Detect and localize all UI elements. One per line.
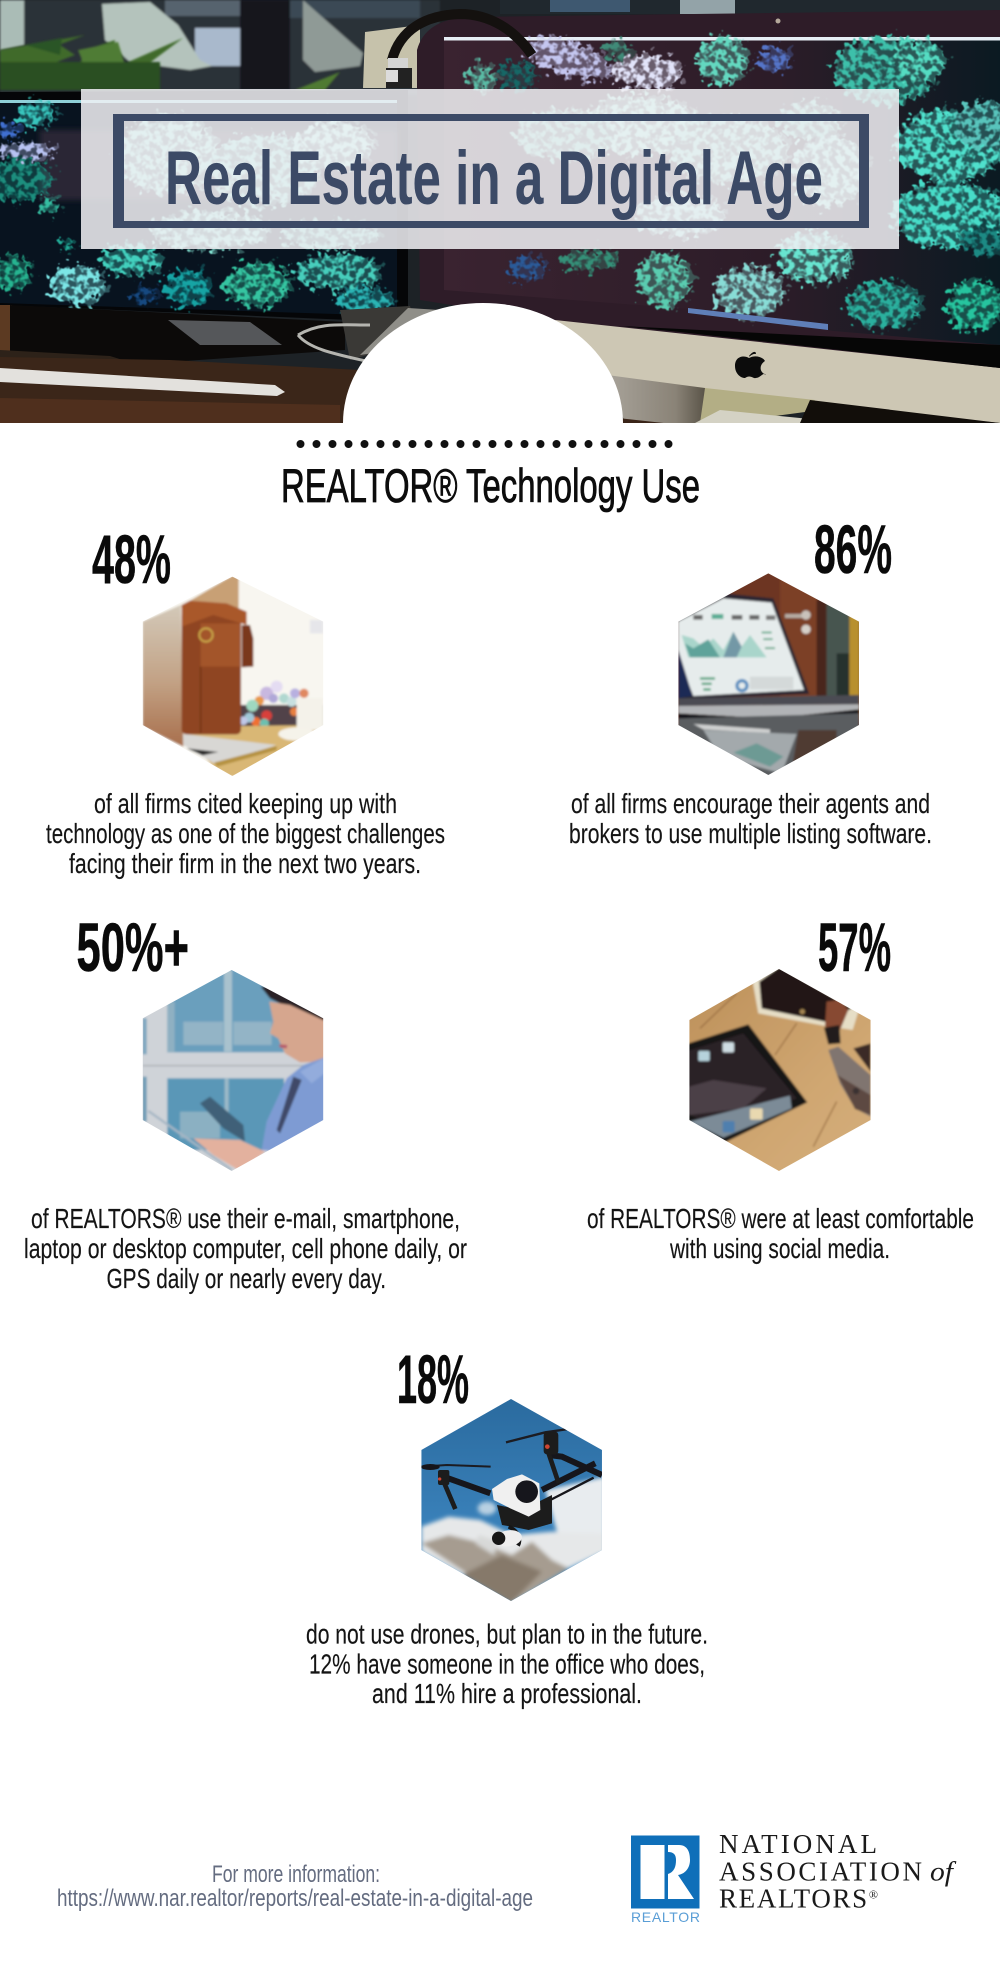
wordmark: organisation name: NATIONAL [719,1829,877,1859]
number: 18% [397,1341,469,1418]
photo: tablet on wood table [689,969,871,1171]
dock [688,308,828,330]
iMac stand [607,375,705,423]
stat panel: 57% [587,909,974,1264]
description: with using social media. [669,1233,890,1264]
wordmark: organisation name [719,1829,957,1914]
wordmark: organisation name: of [930,1856,957,1886]
description: and 11% hire a professional. [372,1678,642,1709]
stat panel: 86% [569,511,932,849]
footer source text [57,1861,533,1912]
description [24,1203,467,1294]
headphones [392,14,532,60]
wordmark: organisation name: ® [869,1888,878,1902]
description [587,1203,974,1264]
stat panel: 18% [306,1341,708,1709]
right iMac body [417,10,1000,370]
photo: leather bag [142,576,324,776]
description [569,788,932,849]
stat panel: 50%+ [24,909,467,1294]
right screen trees [466,27,1000,331]
description [306,1618,708,1709]
section heading: REALTOR® Technology Use [281,459,700,512]
logo: National Association of Realtors [631,1829,957,1925]
left monitor stand and desk [623,418,664,423]
description: of all firms cited keeping up with [94,788,397,819]
stat panel: 48% [46,521,445,879]
number: 50%+ [76,909,189,986]
title frame [113,114,869,228]
plant [0,35,340,90]
number: 86% [814,511,892,588]
description: do not use drones, but plan to in the future. [306,1618,708,1650]
hero photo: desk with two monitors [0,0,1000,423]
description: 12% have someone in the office who does, [309,1648,705,1680]
dotted divider [300,440,670,448]
description: laptop or desktop computer, cell phone daily, or [24,1233,467,1264]
number: 48% [92,521,171,598]
apple logo [735,352,766,378]
description [46,788,445,879]
description: GPS daily or nearly every day. [106,1263,386,1294]
REALTOR wordmark: REALTOR [631,1909,700,1925]
white arch [343,303,623,423]
wordmark: organisation name: REALTORS [719,1884,867,1914]
wordmark: organisation name: ASSOCIATION [719,1856,922,1886]
chin of iMac [555,320,1000,423]
photo: drone [421,1399,602,1601]
description: of REALTORS® use their e-mail, smartphone, [31,1203,460,1234]
footer source text: For more information: [212,1861,380,1888]
left monitor [0,90,408,325]
photo: woman with tablet [142,970,324,1171]
description: facing their firm in the next two years. [69,848,421,879]
description: technology as one of the biggest challenges [46,818,445,849]
number: 57% [818,909,891,986]
silver iMac back [363,25,420,88]
footer source text: https://www.nar.realtor/reports/real-estate-in-a-digital-age [57,1885,533,1912]
icon: R block [631,1836,700,1908]
title overlay panel [81,89,899,249]
photo: laptop with charts [678,574,859,775]
